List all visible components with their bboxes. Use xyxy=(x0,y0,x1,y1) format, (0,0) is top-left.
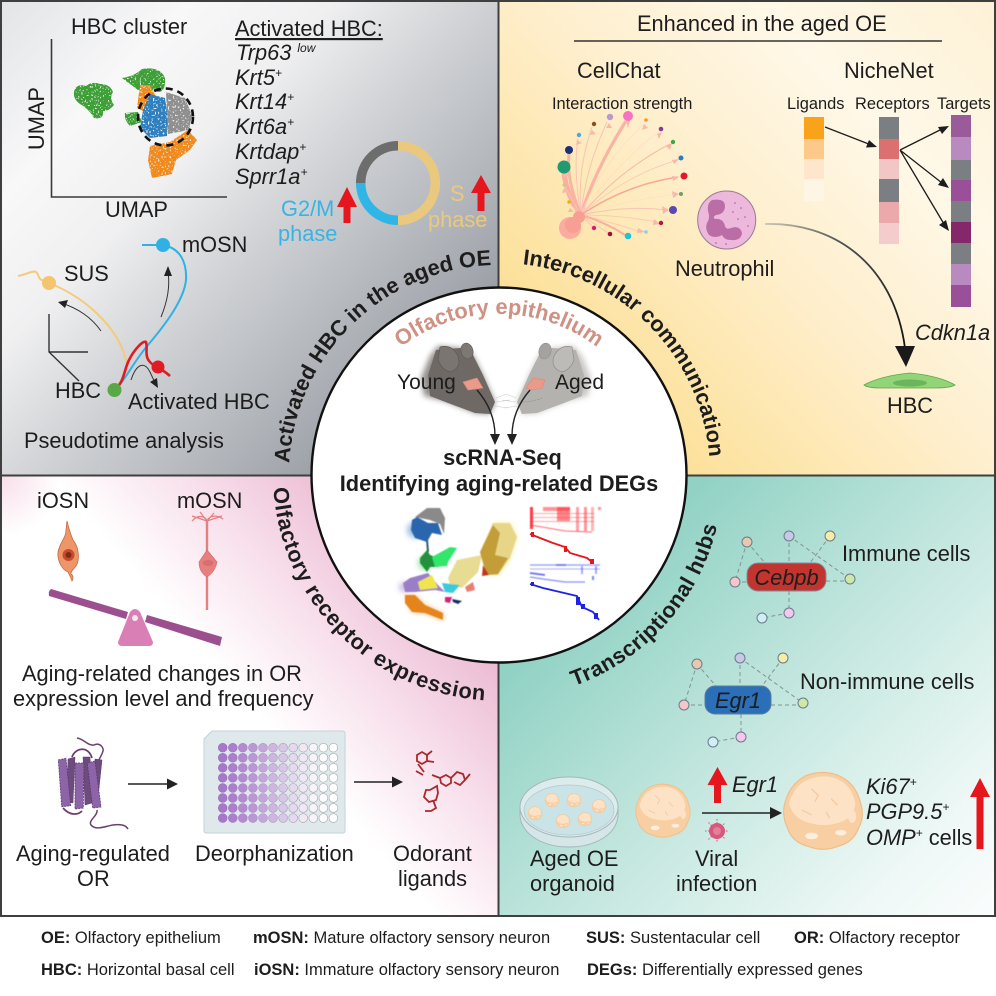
icon: virus xyxy=(705,819,729,843)
text: aging-related changes: expression level and frequency xyxy=(13,686,314,711)
glossary row 1: mOSN: Mature olfactory sensory neuron xyxy=(253,929,550,947)
activated branch xyxy=(116,342,170,388)
network: Egr1 non-immune cells: Egr1 xyxy=(715,688,761,713)
label: young: Young xyxy=(397,371,456,394)
icon: aged mouse xyxy=(502,342,591,414)
NicheNet plot: Targets xyxy=(937,95,991,113)
glossary row 2 xyxy=(41,961,863,979)
NicheNet plot: Receptors xyxy=(855,95,930,113)
HBC label: HBC xyxy=(887,393,933,418)
iOSN cell: iOSN xyxy=(37,488,89,513)
DEG heatmap: up-regulated xyxy=(530,507,601,564)
dashed activated HBC circle xyxy=(138,88,193,146)
glossary row 1: OR: Olfactory receptor xyxy=(794,929,960,947)
pseudotime trajectory: HBC xyxy=(55,378,101,403)
label: aging-regulated OR xyxy=(16,841,170,891)
marker list: activated HBC: + xyxy=(300,165,307,179)
network: Cebpb immune cells: Cebpb xyxy=(754,565,819,590)
glossary row 1: SUS: Sustentacular cell xyxy=(586,929,760,947)
column labels: Ligands xyxy=(787,95,844,113)
text: aging-related changes: Aging-related changes in OR xyxy=(22,661,302,686)
global UMAP xyxy=(399,508,517,620)
receptor tails xyxy=(77,738,128,829)
y axis label: UMAP xyxy=(24,87,49,150)
marker list: activated HBC: + xyxy=(287,115,294,129)
UMAP clusters xyxy=(403,508,517,620)
interaction edges xyxy=(564,121,678,235)
glossary footer xyxy=(41,929,960,979)
label: Egr1 up: Egr1 xyxy=(732,772,778,797)
cell-type nodes xyxy=(623,111,633,121)
curved heading: olfactory epithelium: Olfactory epithelium xyxy=(396,300,602,346)
network edges xyxy=(735,536,850,618)
label: odorant ligands: Odorant xyxy=(393,841,472,866)
label: aged OE organoid xyxy=(530,846,618,896)
trajectory nodes xyxy=(42,276,56,290)
NicheNet title: NicheNet xyxy=(844,58,934,83)
marker list: activated HBC: + xyxy=(287,90,294,104)
target bar xyxy=(951,115,971,307)
scatter points xyxy=(74,68,197,178)
mOSN cell: mOSN xyxy=(177,488,242,513)
receptor to target arrows xyxy=(900,126,949,231)
panel: intercellular communication xyxy=(499,0,996,476)
arrow: young sample xyxy=(477,390,500,445)
G2/M phase label xyxy=(278,196,337,246)
back helices xyxy=(67,757,102,805)
panel: transcriptional hubs xyxy=(499,476,996,917)
label: aged: Aged xyxy=(555,371,604,394)
UMAP axes xyxy=(52,39,227,197)
label: marker-positive cells: Ki67 xyxy=(866,774,910,799)
glossary row 2: DEGs: Differentially expressed genes xyxy=(587,961,863,979)
panel: olfactory receptor expression xyxy=(0,476,499,917)
label: marker-positive cells xyxy=(866,774,972,850)
DEG heatmap: down-regulated xyxy=(530,565,600,620)
arrow: organoid growth xyxy=(702,807,782,819)
NicheNet plot xyxy=(787,58,991,307)
label: marker-positive cells: cells xyxy=(923,825,972,850)
pseudotime trajectory xyxy=(18,232,270,453)
marker genes: low xyxy=(297,41,317,55)
ligand bar xyxy=(804,117,824,201)
arrow: receptor to plate xyxy=(128,778,178,790)
marker list: activated HBC: Krt5 xyxy=(235,65,275,90)
CellChat plot xyxy=(552,58,692,239)
heading: enhanced in the aged OE: Enhanced in the aged OE xyxy=(637,11,887,36)
marker list: activated HBC: Sprr1a xyxy=(235,164,300,189)
network nodes xyxy=(730,531,855,623)
neutrophil label: Neutrophil xyxy=(675,256,774,281)
source node blob xyxy=(559,211,585,239)
UMAP scatter: HBC cluster xyxy=(24,14,227,222)
curved title: activated HBC: Activated HBC in the aged OE xyxy=(274,250,491,463)
S phase label: S xyxy=(450,181,465,206)
marker genes: Trp63 xyxy=(236,40,291,65)
label: odorant ligands xyxy=(393,841,472,891)
icon: neutrophil xyxy=(675,191,774,281)
direction arrows xyxy=(61,272,169,385)
center circle: scRNA-Seq xyxy=(310,286,688,664)
G2/M phase label: G2/M xyxy=(281,196,334,221)
icon: young mouse xyxy=(421,342,510,414)
icon: HBC cell xyxy=(864,373,955,418)
marker list: activated HBC: + xyxy=(275,66,282,80)
network: Egr1 non-immune cells xyxy=(679,653,975,747)
label: aged OE organoid: Aged OE xyxy=(530,846,618,871)
label: marker-positive cells: + xyxy=(942,800,949,814)
label: viral infection: Viral xyxy=(695,846,738,871)
label: aged OE organoid: organoid xyxy=(530,871,615,896)
S phase label: phase xyxy=(428,207,487,232)
label: deorphanization: Deorphanization xyxy=(195,841,354,866)
network nodes xyxy=(679,653,808,747)
donut ring xyxy=(361,146,435,220)
receptor bar xyxy=(879,117,899,244)
label: viral infection: infection xyxy=(676,871,757,896)
icon: young olfactory patch xyxy=(463,378,483,390)
icon: aged olfactory patch xyxy=(526,378,545,390)
curved title: intercellular communication: Intercellular communication xyxy=(524,250,721,456)
marker list: activated HBC xyxy=(235,16,383,189)
label: viral infection xyxy=(676,846,757,896)
ligand to receptor arrow xyxy=(825,127,877,148)
marker list: activated HBC: Krt6a xyxy=(235,114,287,139)
icon: seesaw xyxy=(49,589,222,646)
CellChat title: CellChat xyxy=(577,58,661,83)
UMAP halo xyxy=(399,522,517,620)
icon: small organoid xyxy=(636,784,690,837)
curved title: olfactory receptor expression: Olfactory receptor expression xyxy=(274,488,484,700)
network: Cebpb immune cells xyxy=(730,531,970,623)
iOSN cell xyxy=(37,488,89,581)
arrow: neutrophil to HBC xyxy=(765,224,915,367)
trajectory labels: SUS xyxy=(64,261,109,286)
mOSN branch xyxy=(118,245,186,387)
text: aging-related changes xyxy=(13,661,314,711)
cell cycle donut xyxy=(278,146,491,246)
label: odorant ligands: ligands xyxy=(398,866,467,891)
icon: well plate xyxy=(204,731,345,833)
front helices xyxy=(58,758,101,809)
target arrowheads xyxy=(562,118,679,233)
mOSN cell xyxy=(177,488,242,610)
label: aging-regulated OR: Aging-regulated xyxy=(16,841,170,866)
icon: petri dish with organoids xyxy=(520,777,618,847)
label: aging-regulated OR: OR xyxy=(77,866,110,891)
red up arrow S xyxy=(471,175,491,211)
marker list heading: Activated HBC: xyxy=(235,16,383,41)
Cebpb hub xyxy=(747,563,826,591)
arrow: aged sample xyxy=(507,390,530,445)
G2/M phase label: phase xyxy=(278,221,337,246)
S phase label xyxy=(428,181,487,232)
heading: HBC cluster: HBC cluster xyxy=(71,14,187,39)
label: immune cells: Immune cells xyxy=(842,541,970,566)
Cdkn1a label: Cdkn1a xyxy=(915,320,990,345)
label: marker-positive cells: OMP xyxy=(866,825,916,850)
glossary row 2: HBC: Horizontal basal cell xyxy=(41,961,234,979)
label: marker-positive cells: PGP9.5 xyxy=(866,799,942,824)
heading: scRNA-Seq: scRNA-Seq xyxy=(443,445,562,470)
Egr1 hub xyxy=(705,686,771,714)
marker list: activated HBC: + xyxy=(299,140,306,154)
network edges xyxy=(684,658,803,742)
marker list: activated HBC: Krtdap xyxy=(235,139,299,164)
pseudotime trajectory: Pseudotime analysis xyxy=(24,428,224,453)
interaction strength label: Interaction strength xyxy=(552,95,692,113)
glossary row 1: OE: Olfactory epithelium xyxy=(41,929,221,947)
heading: identifying DEGs: Identifying aging-related DEGs xyxy=(340,471,658,496)
SUS branch xyxy=(18,271,127,388)
icon: odorant molecules xyxy=(416,751,470,811)
3D axes xyxy=(49,314,88,381)
curved title: transcriptional hubs: Transcriptional hubs xyxy=(568,524,716,684)
icon: large organoid xyxy=(784,773,862,849)
red up arrow G2/M xyxy=(337,187,357,223)
x axis label: UMAP xyxy=(105,197,168,222)
glossary row 2: iOSN: Immature olfactory sensory neuron xyxy=(254,961,559,979)
arrow: plate to ligands xyxy=(354,776,403,788)
label: marker-positive cells: + xyxy=(910,775,917,789)
label: non-immune cells: Non-immune cells xyxy=(800,669,975,694)
panel: activated HBC in the aged OE xyxy=(0,0,499,476)
red up arrow Egr1 xyxy=(708,767,728,803)
red up arrow cells xyxy=(970,778,990,849)
glossary row 1 xyxy=(41,929,960,947)
marker list: activated HBC: Krt14 xyxy=(235,89,287,114)
icon: olfactory receptor xyxy=(58,738,128,829)
pseudotime trajectory: Activated HBC xyxy=(128,389,270,414)
label: marker-positive cells: + xyxy=(916,826,923,840)
pseudotime trajectory: mOSN xyxy=(182,232,247,257)
